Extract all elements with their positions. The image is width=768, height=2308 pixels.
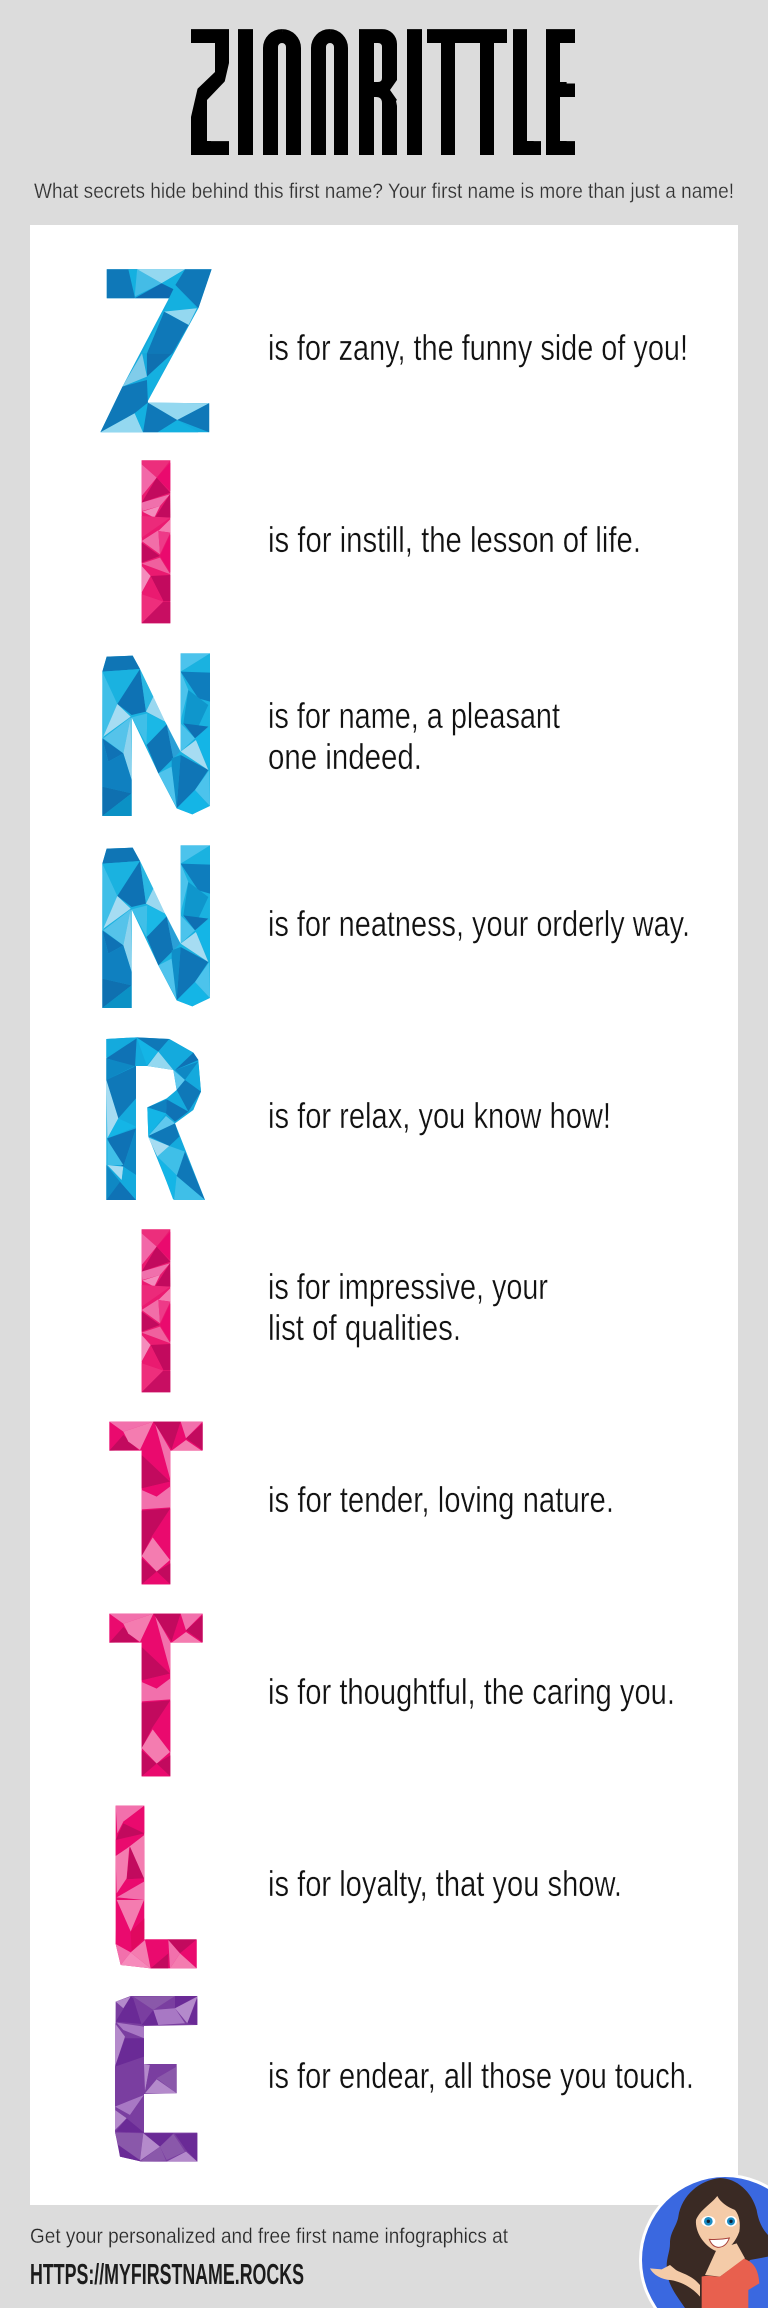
letter T second	[109, 1614, 203, 1776]
letter Z	[100, 269, 212, 432]
row text: L: is for loyalty, that you show.	[268, 1863, 622, 1904]
row text: N	[268, 695, 560, 777]
avatar hair	[667, 2178, 768, 2308]
row text: R: is for relax, you know how!	[268, 1095, 611, 1136]
letter T	[109, 1422, 203, 1584]
letter I second	[142, 1229, 170, 1392]
avatar eyes	[701, 2216, 737, 2227]
avatar arm	[650, 2265, 700, 2297]
letter E	[115, 1996, 197, 2162]
row text: I second	[268, 1266, 548, 1348]
footer text: Get your personalized and free first name infographics at	[30, 2225, 508, 2248]
row text: I: is for instill, the lesson of life.	[268, 519, 641, 560]
row text: I second: list of qualities.	[268, 1307, 461, 1348]
avatar shirt	[702, 2259, 759, 2308]
avatar smile	[709, 2238, 729, 2247]
row text: T second: is for thoughtful, the caring you.	[268, 1671, 675, 1712]
row text: N: one indeed.	[268, 736, 422, 777]
row text: I second: is for impressive, your	[268, 1266, 548, 1307]
avatar face	[696, 2196, 740, 2251]
footer url: HTTPS://MYFIRSTNAME.ROCKS	[30, 2259, 304, 2291]
letter N	[102, 653, 210, 816]
avatar	[639, 2174, 768, 2308]
avatar neck	[705, 2243, 745, 2277]
row text: N: is for name, a pleasant	[268, 695, 560, 736]
letter L	[116, 1806, 197, 1968]
letter N second	[102, 845, 210, 1008]
row text: T: is for tender, loving nature.	[268, 1479, 614, 1520]
panel: letters	[30, 225, 738, 2205]
letter R	[106, 1037, 205, 1200]
letter I	[142, 460, 170, 623]
